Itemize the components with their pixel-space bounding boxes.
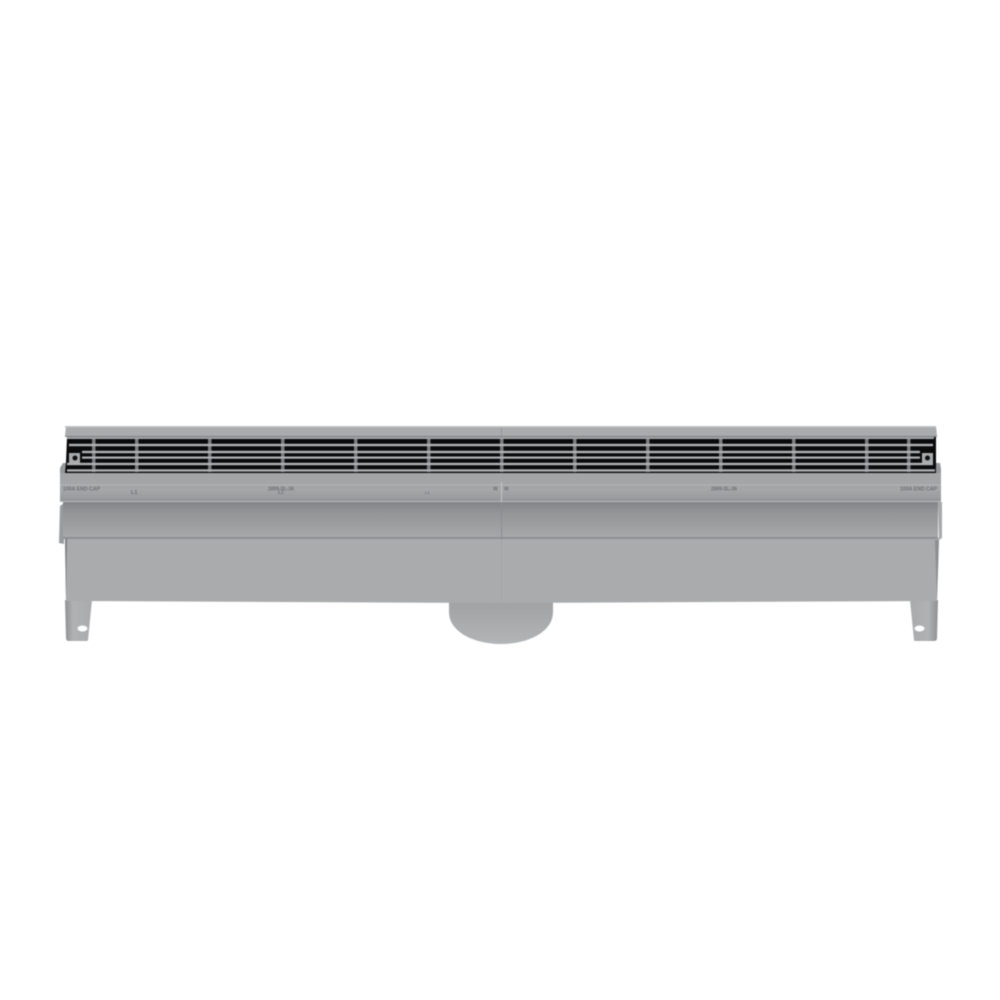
sloped channel wall [63,502,938,539]
grate opening [65,437,936,473]
lip marking: right part number: 2899-SL-36 [711,486,737,492]
lip marking: second L1: L1 [278,490,284,496]
lower channel body [65,538,939,603]
lip marking: right end cap: 100A END CAP [900,486,937,492]
lip marking: left part number: 2899-SL-36 [268,486,294,492]
top flange [65,426,937,439]
front lip [60,473,941,502]
right fixing tab [922,453,933,463]
left end cap bulge [59,463,66,544]
lip marking: third L1: L1 [425,490,430,495]
left fixing tab [69,453,80,463]
right mounting foot [910,600,938,641]
left mounting foot [65,600,92,641]
right end cap bulge [936,463,942,540]
lip marking: left W: W [493,486,498,492]
grate cross ties [92,439,910,472]
lip marking: left end cap: 100A END CAP [63,486,100,492]
grate [65,437,936,473]
outlet pipe [449,602,553,644]
lip marking: right W: W [504,486,509,492]
lip marking: left L1: L1 [131,490,137,496]
grate bars [67,444,935,472]
